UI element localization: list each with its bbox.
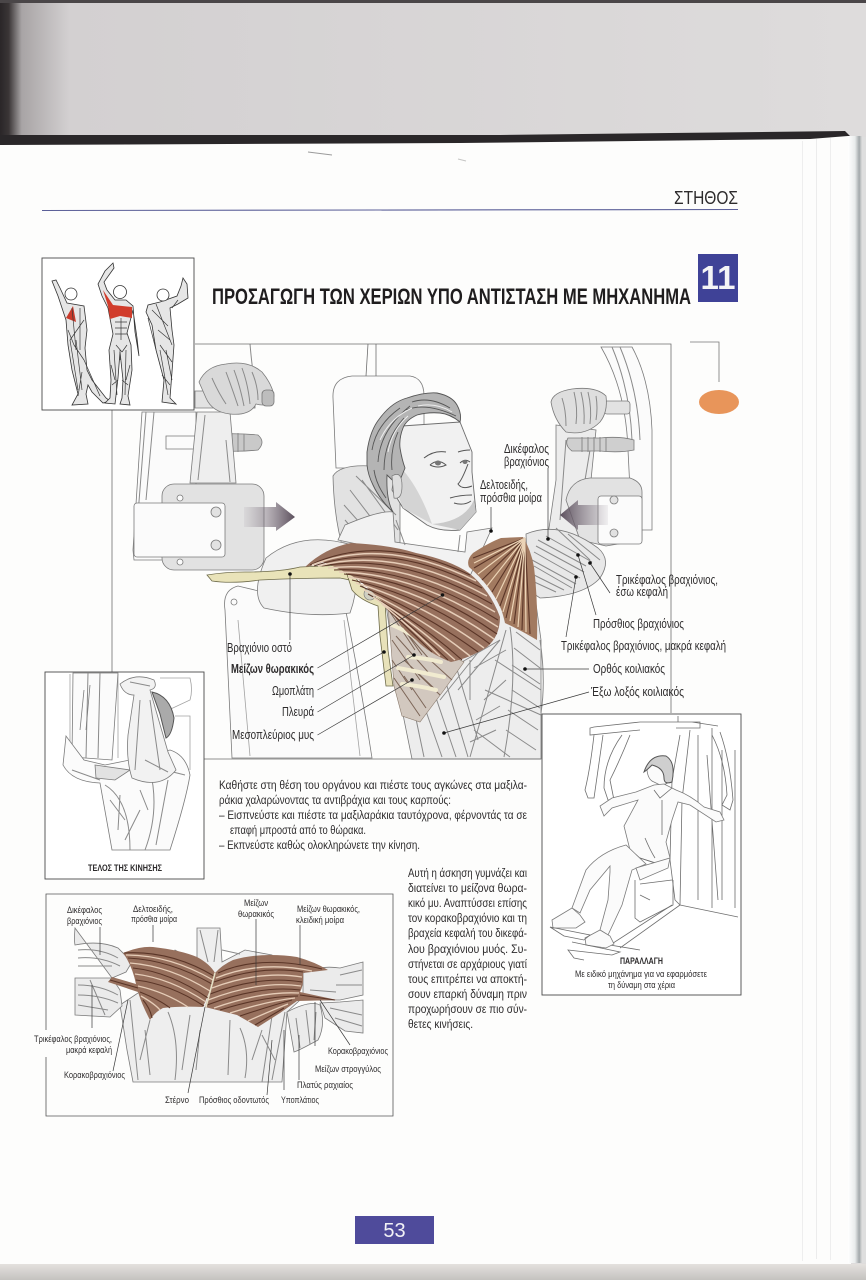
anatomy labels: Στέρνο	[165, 1095, 189, 1106]
main labels: Ωμοπλάτη	[272, 684, 314, 698]
face	[392, 422, 476, 530]
main labels: Τρικέφαλος βραχιόνιος, μακρά κεφαλή	[561, 639, 726, 653]
anatomy labels: Κορακοβραχιόνιος	[64, 1070, 125, 1081]
anatomy labels: Μείζων θωρακικός,	[297, 904, 360, 915]
anatomy labels: Μείζων	[244, 898, 268, 909]
main illustration frame	[112, 344, 671, 759]
page number: 53	[383, 1220, 406, 1242]
panel: variation with special machine	[542, 714, 741, 995]
main labels: Βραχιόνιο οστό	[227, 641, 292, 655]
description text block: στήνεται σε αρχάριους γιατί	[408, 958, 527, 971]
pectoralis major, far side	[468, 537, 537, 640]
main labels: Μεσοπλεύριος μυς	[232, 728, 314, 742]
neck and shoulder	[338, 512, 492, 576]
leader lines	[92, 919, 350, 1095]
ear	[392, 474, 402, 498]
near arm	[74, 928, 132, 1017]
exercise number badge	[698, 254, 738, 302]
humerus bone	[207, 565, 350, 582]
raised arm	[120, 677, 176, 782]
torso and abdominal muscles	[384, 545, 543, 759]
sternum line	[206, 973, 215, 1007]
seat background	[70, 674, 192, 770]
anatomy labels: Κορακοβραχιόνιος	[328, 1046, 388, 1057]
direction arrow, right-pointing	[244, 502, 295, 531]
pectoralis major, far side	[205, 955, 337, 1027]
description text block: διατείνει το μείζονα θωρα-	[408, 882, 527, 895]
head	[367, 393, 476, 530]
seated woman	[600, 756, 724, 866]
section heading rule	[42, 210, 738, 211]
main labels: Μείζων θωρακικός	[231, 662, 314, 676]
seat back and headrest	[225, 344, 424, 758]
direction arrow, left-pointing	[560, 500, 608, 530]
anatomy labels: Πρόσθιος οδοντωτός	[199, 1095, 269, 1106]
anatomy labels: θωρακικός	[238, 909, 274, 920]
anatomy labels: μακρά κεφαλή	[66, 1045, 112, 1056]
main labels: Ορθός κοιλιακός	[593, 662, 665, 676]
instructions text block: – Εκπνεύστε καθώς ολοκληρώνετε την κίνηση.	[219, 839, 420, 852]
right machine tower	[601, 347, 652, 530]
description text block: προχωρήσουν σε πιο σύν-	[408, 1003, 527, 1016]
far upper arm	[526, 528, 606, 598]
figure: side view	[52, 280, 110, 405]
main labels: έσω κεφαλή	[616, 585, 668, 599]
orange tab marker with bracket	[690, 342, 739, 414]
main illustration: seated chest press	[133, 344, 652, 759]
anatomy labels: Τρικέφαλος βραχιόνιος,	[34, 1034, 112, 1045]
back torso	[63, 736, 190, 850]
description text block: λου βραχιόνιου μυός. Συ-	[408, 943, 527, 956]
figure: back view	[146, 278, 188, 404]
right hand on grip	[551, 388, 630, 433]
description text block: κικό μυ. Αναπτύσσει επίσης	[408, 897, 527, 910]
left machine tower	[133, 344, 256, 560]
caption: Με ειδικό μηχάνημα για να εφαρμόσετε	[575, 969, 708, 980]
left forearm	[190, 412, 236, 483]
rib cage with intercostal muscles	[388, 606, 464, 722]
facial features	[424, 450, 472, 504]
anatomy labels: πρόσθια μοίρα	[131, 914, 177, 925]
seated woman legs	[550, 845, 670, 960]
page number	[355, 1216, 434, 1244]
caption: ΤΕΛΟΣ ΤΗΣ ΚΙΝΗΣΗΣ	[88, 863, 162, 874]
far arm	[287, 962, 363, 1052]
anatomy labels: Δελτοειδής,	[133, 904, 173, 915]
machine plates	[72, 673, 118, 760]
description text block: Αυτή η άσκηση γυμνάζει και	[408, 867, 527, 880]
right lower handle	[567, 437, 634, 452]
left arm pad	[134, 484, 264, 570]
scapula	[345, 568, 393, 686]
head	[152, 692, 174, 738]
caption	[575, 956, 708, 991]
pectoralis major, near side	[305, 543, 500, 662]
instructions text block: επαφή μπροστά από το θώρακα.	[230, 824, 366, 837]
pectoralis major, near side	[108, 947, 215, 1020]
anatomy labels: Μείζων στρογγύλος	[315, 1064, 381, 1075]
anatomy labels: Δικέφαλος	[67, 905, 102, 916]
main labels: βραχιόνιος	[504, 455, 549, 469]
caption: τη δύναμη στα χέρια	[608, 980, 675, 991]
right forearm	[548, 425, 596, 540]
instructions text block: ράκια χαλαρώνοντας τα αντιβράχια και τους καρπούς:	[219, 794, 451, 807]
torso and neck	[120, 928, 300, 1082]
main labels	[227, 442, 726, 742]
anatomy labels: Πλατύς ραχιαίος	[297, 1080, 353, 1091]
main labels: Δικέφαλος	[504, 442, 549, 456]
instructions text block: Καθήστε στη θέση του οργάνου και πιέστε τους αγκώνες στα μαξιλα-	[219, 779, 527, 792]
description text block: βραχεία κεφαλή του δικεφά-	[408, 927, 527, 940]
instructions text block	[219, 779, 527, 852]
left lower handle	[166, 433, 262, 452]
machine frame	[585, 716, 738, 950]
main labels: Πρόσθιος βραχιόνιος	[593, 617, 684, 631]
hair	[367, 393, 461, 512]
main labels: Δελτοειδής,	[480, 478, 528, 492]
instructions text block: – Εισπνεύστε και πιέστε τα μαξιλαράκια ταυτόχρονα, φέρνοντάς τα σε	[219, 809, 527, 822]
section heading: ΣΤΗΘΟΣ	[674, 188, 738, 208]
exercise number badge: 11	[701, 259, 735, 296]
main labels: πρόσθια μοίρα	[480, 491, 542, 505]
right arm pad	[566, 478, 642, 546]
anatomy labels: Υποπλάτιος	[281, 1095, 319, 1106]
description text block: τον κορακοβραχιόνιο και τη	[408, 912, 527, 925]
figure: front view	[98, 263, 139, 405]
panel: end of the movement	[45, 672, 204, 879]
description text block: θετες κινήσεις.	[408, 1018, 473, 1031]
title: ΠΡΟΣΑΓΩΓΗ ΤΩΝ ΧΕΡΙΩΝ ΥΠΟ ΑΝΤΙΣΤΑΣΗ ΜΕ ΜΗΧΑΝΗΜΑ	[212, 284, 691, 309]
anatomy labels: κλειδική μοίρα	[296, 915, 344, 926]
caption: ΠΑΡΑΛΛΑΓΗ	[620, 956, 663, 967]
main labels: Έξω λοξός κοιλιακός	[590, 685, 684, 699]
description text block: τους επιτρέπει να αποκτή-	[408, 973, 527, 986]
facial shading	[396, 470, 432, 524]
anatomy labels	[34, 898, 388, 1106]
near upper arm behind chest	[257, 540, 357, 615]
panel: chest muscles anatomy	[34, 894, 393, 1116]
main labels: Πλευρά	[282, 705, 314, 719]
leader lines and dots	[288, 468, 610, 735]
panel: muscle chart thumbnail	[42, 258, 194, 410]
description text block	[408, 867, 527, 1031]
left hand on grip	[195, 363, 274, 414]
anatomy labels: βραχιόνιος	[67, 916, 102, 927]
main labels: Τρικέφαλος βραχιόνιος,	[616, 573, 718, 587]
description text block: σουν επαρκή δύναμη πριν	[408, 988, 527, 1001]
